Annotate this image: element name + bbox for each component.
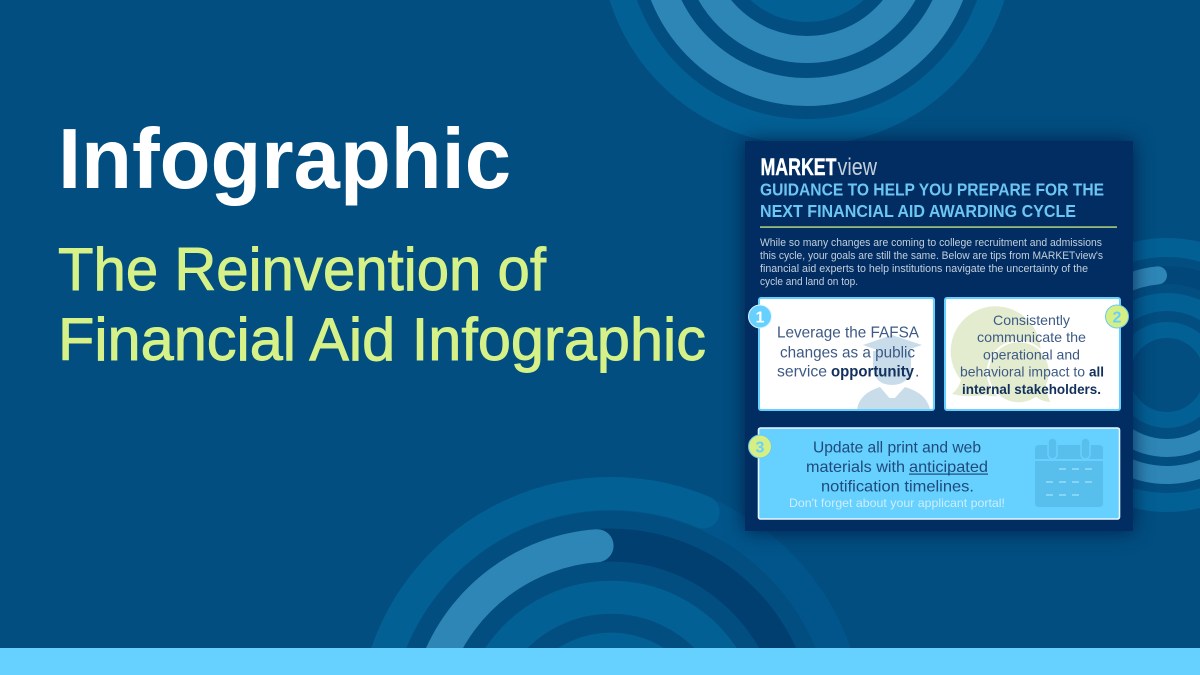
card heading: NEXT FINANCIAL AID AWARDING CYCLE xyxy=(760,201,1076,221)
concentric circles: right xyxy=(1040,248,1200,502)
intro paragraph: this cycle, your goals are still the same. Below are tips from MARKETview's xyxy=(760,250,1103,262)
logo: MARKETview: view xyxy=(838,154,878,181)
title: Infographic xyxy=(58,112,511,207)
intro paragraph: cycle and land on top. xyxy=(760,276,858,288)
tip 2 text: behavioral impact to xyxy=(960,364,1085,380)
panel: tip 3 xyxy=(758,428,1120,519)
intro paragraph xyxy=(760,237,1103,288)
tip 3 text: anticipated xyxy=(909,459,988,476)
tip 2 text: all xyxy=(1089,364,1104,380)
tip 3 text: materials with xyxy=(806,459,905,476)
icon: calendar xyxy=(1035,438,1103,507)
badge 3 xyxy=(748,435,772,458)
concentric circles: bottom xyxy=(383,494,839,665)
badge 1 xyxy=(748,305,772,328)
tip 2 text: internal stakeholders. xyxy=(962,381,1101,397)
badge 1: 1 xyxy=(756,310,765,326)
tip 2 text: communicate the xyxy=(977,329,1086,345)
panel: infographic preview card xyxy=(745,141,1133,531)
subtitle: Financial Aid Infographic xyxy=(58,306,706,373)
tip 2 text: operational and xyxy=(983,346,1080,362)
concentric circles: top xyxy=(613,0,1001,132)
badge 2: 2 xyxy=(1113,310,1122,326)
intro paragraph: financial aid experts to help institutions navigate the uncertainty of the xyxy=(760,263,1088,275)
bottom accent bar xyxy=(0,648,1200,675)
logo: MARKETview: MARKET xyxy=(760,154,837,181)
icon: speech bubbles xyxy=(951,306,1052,403)
badge 2 xyxy=(1106,305,1128,328)
tip 1 text: . xyxy=(915,364,919,381)
subtitle xyxy=(58,236,706,373)
tip 1 text xyxy=(777,325,919,381)
badge 3: 3 xyxy=(756,440,765,456)
tip 1 text: Leverage the FAFSA xyxy=(777,325,919,342)
card heading xyxy=(760,180,1104,221)
tip 3 note: Don't forget about your applicant portal! xyxy=(789,496,1005,510)
tip 3 text: Update all print and web xyxy=(813,440,981,457)
tip 1 text: service xyxy=(777,364,827,381)
card heading: GUIDANCE TO HELP YOU PREPARE FOR THE xyxy=(760,180,1104,200)
panel: tip 2 xyxy=(945,298,1120,410)
intro paragraph: While so many changes are coming to college recruitment and admissions xyxy=(760,237,1102,249)
icon: graduate xyxy=(857,335,930,409)
tip 1 text: changes as a public xyxy=(780,345,915,362)
tip 3 text: notification timelines. xyxy=(821,479,974,496)
panel: tip 1 xyxy=(759,298,934,410)
subtitle: The Reinvention of xyxy=(58,236,546,303)
tip 2 text xyxy=(960,312,1104,397)
tip 3 text xyxy=(806,440,988,496)
tip 2 text: Consistently xyxy=(993,312,1070,328)
tip 1 text: opportunity xyxy=(831,364,914,381)
